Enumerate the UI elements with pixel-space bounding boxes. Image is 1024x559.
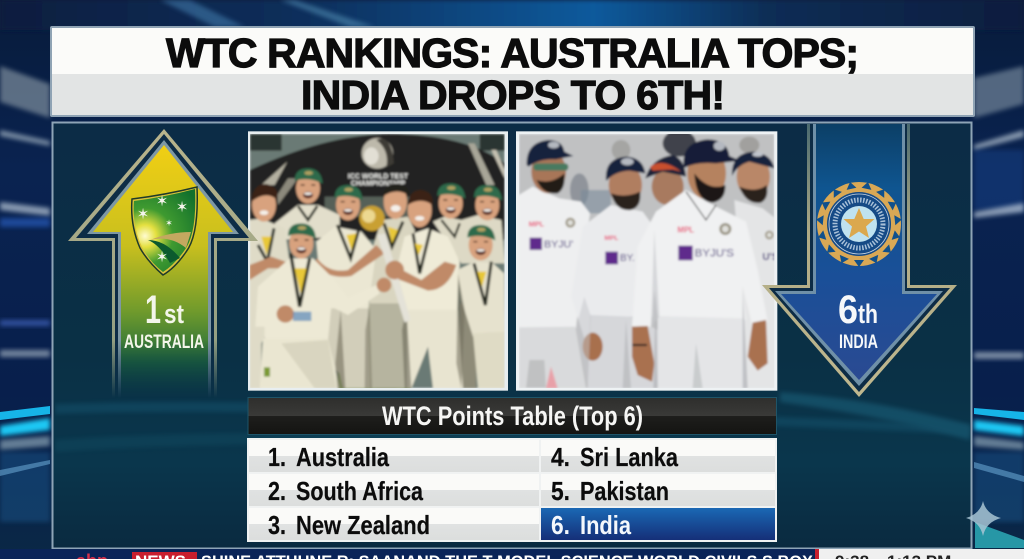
- rank label: 1st Australia: [124, 288, 204, 353]
- points table: 4.: [551, 442, 570, 472]
- points table: India: [580, 510, 631, 540]
- points table: [247, 438, 777, 542]
- rank label: 6th India: th: [858, 299, 878, 329]
- photo: India team walking: BYJU': [544, 239, 573, 250]
- photo: Australia team celebrating: [248, 131, 508, 391]
- points table: 6.: [551, 510, 570, 540]
- icon: Australia shield: ✶: [165, 218, 173, 228]
- photo: India team walking: U'S: [762, 252, 779, 263]
- photo: Australia team celebrating: ICC WORLD TEST: [348, 173, 409, 180]
- icon: Australia shield: ✶: [137, 206, 149, 223]
- points table: 1.: [268, 442, 286, 472]
- icon: Australia shield: ✶: [156, 193, 168, 210]
- icon: Australia shield: [132, 187, 197, 275]
- icon: Australia shield: ✶: [176, 199, 188, 216]
- photo: Australia team celebrating: CHAMPIONSHIP: [351, 181, 406, 188]
- rank label: 6th India: 6: [838, 288, 858, 332]
- title heading: [166, 30, 859, 118]
- points table: 5.: [551, 476, 570, 506]
- points table: Australia: [296, 442, 389, 472]
- photo: India team walking: [516, 130, 779, 391]
- icon: BCCI crest: [816, 181, 902, 267]
- arrow: Australia up: [68, 129, 258, 398]
- icon: Australia shield: ✶: [156, 249, 168, 266]
- news ticker: [0, 549, 1024, 559]
- rank label: 1st Australia: st: [164, 299, 184, 329]
- points table: Sri Lanka: [580, 442, 678, 472]
- table header: [248, 398, 776, 434]
- photo: India team walking: BYJU'S: [695, 248, 734, 260]
- main panel: [52, 122, 972, 548]
- icon: sparkle watermark: [966, 501, 1024, 548]
- points table: 2.: [268, 476, 286, 506]
- rank label: 6th India: [838, 288, 878, 353]
- photo: India team walking: MPL: [604, 235, 618, 242]
- table header: WTC Points Table (Top 6): [382, 401, 643, 431]
- points table: New Zealand: [296, 510, 430, 540]
- row: India highlight: [541, 508, 775, 540]
- points table: South Africa: [296, 476, 423, 506]
- arrow: India down: [762, 124, 957, 397]
- photo: India team walking: MPL: [677, 226, 694, 235]
- points table: 3.: [268, 510, 286, 540]
- rank label: 6th India: INDIA: [839, 332, 878, 353]
- points table: Pakistan: [580, 476, 669, 506]
- title heading: INDIA DROPS TO 6TH!: [301, 72, 725, 118]
- photo: India team walking: BY.: [620, 253, 635, 264]
- title heading: WTC RANKINGS: AUSTRALIA TOPS;: [166, 30, 859, 76]
- rank label: 1st Australia: 1: [145, 288, 161, 332]
- photo: India team walking: MPL: [529, 220, 545, 229]
- rank label: 1st Australia: AUSTRALIA: [124, 332, 204, 353]
- title banner: [50, 26, 975, 118]
